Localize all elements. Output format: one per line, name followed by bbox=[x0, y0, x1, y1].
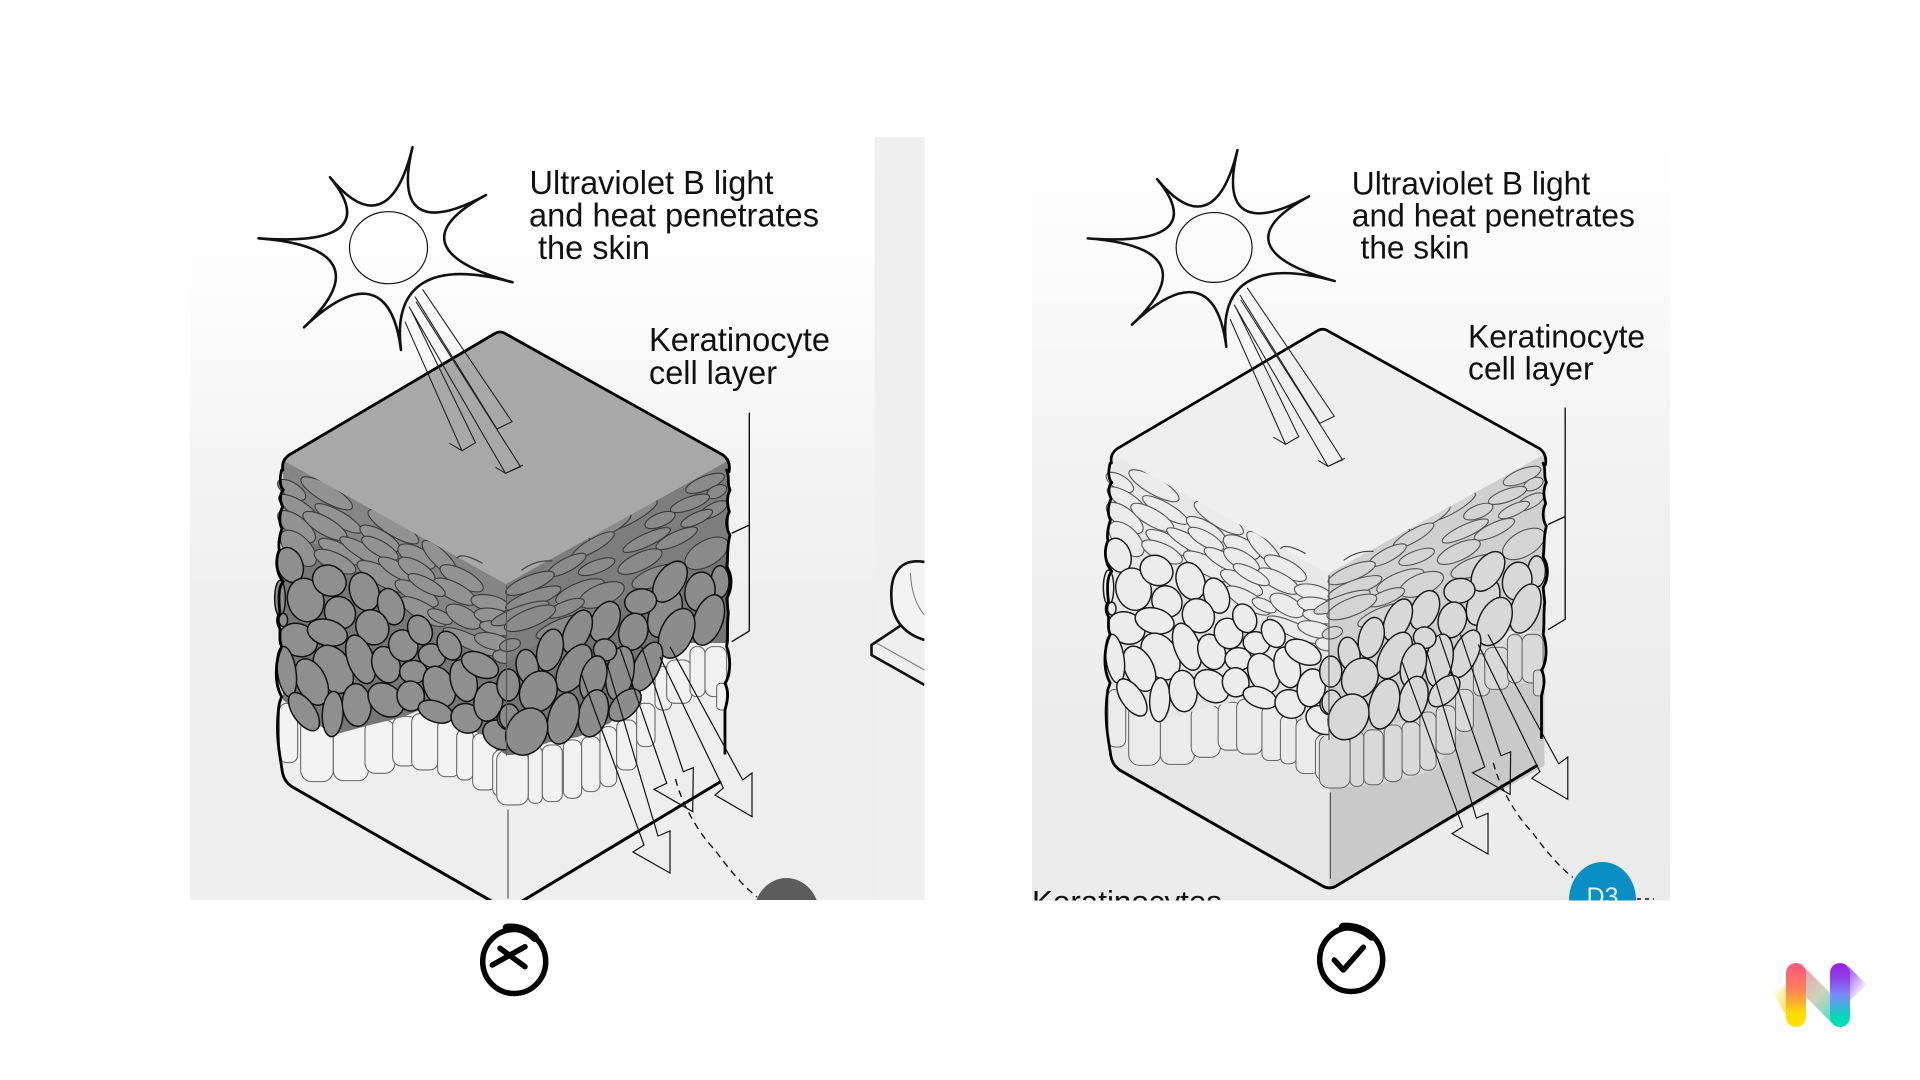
keratinocyte cells right face bbox=[489, 458, 734, 763]
text: ultraviolet label: Ultraviolet B light bbox=[1352, 165, 1590, 201]
text: keratinocyte label: Keratinocyte bbox=[649, 321, 830, 358]
basal cell layer bbox=[1108, 628, 1546, 788]
icon: check mark bbox=[1320, 927, 1383, 992]
vitamin D3 circle bbox=[1569, 862, 1636, 900]
text: ultraviolet label: the skin bbox=[1361, 229, 1470, 265]
neighbouring slide strip bbox=[870, 137, 924, 686]
icon: sun bbox=[258, 147, 512, 350]
text: ultraviolet label: and heat penetrates bbox=[1352, 197, 1635, 233]
text: keratinocyte label: Keratinocyte bbox=[1468, 318, 1645, 354]
vitamin D3 circle: D3 bbox=[1587, 883, 1618, 911]
correct figure bbox=[1088, 150, 1654, 890]
arrows: light passing through skin bbox=[1402, 634, 1568, 854]
text: ultraviolet label: the skin bbox=[538, 229, 650, 266]
arrows: incoming light rays bbox=[1230, 288, 1345, 466]
icon: cross mark bbox=[483, 927, 546, 994]
text: ultraviolet label: and heat penetrates bbox=[529, 196, 819, 234]
skin block lower body bbox=[283, 640, 728, 910]
text: ultraviolet label: Ultraviolet B light bbox=[530, 164, 774, 201]
icon: sun bbox=[1088, 150, 1335, 347]
skin block outline and top face bbox=[1105, 329, 1547, 888]
bracket for keratinocyte layer bbox=[1548, 408, 1565, 630]
arrows: light passing through skin bbox=[582, 647, 752, 873]
bracket for keratinocyte layer bbox=[732, 413, 749, 642]
panel: incorrect example bbox=[190, 137, 926, 952]
logo: gradient N bbox=[1772, 966, 1867, 1022]
grey vitamin circle bbox=[756, 878, 817, 900]
text: keratinocyte label: cell layer bbox=[649, 354, 777, 391]
basal cell layer bbox=[279, 640, 730, 805]
panel background bbox=[190, 401, 874, 900]
dashed path to circle bbox=[676, 779, 757, 897]
arrows: incoming light rays bbox=[405, 289, 523, 473]
text: keratinocyte label: cell layer bbox=[1468, 351, 1594, 387]
keratinocyte cells left face bbox=[1101, 451, 1344, 740]
skin block outline and top face bbox=[276, 332, 731, 908]
dashed path to D3 bbox=[1493, 763, 1573, 877]
keratinocyte cells left face bbox=[272, 458, 522, 756]
panel background bbox=[1032, 360, 1670, 900]
keratinocyte cells right face bbox=[1312, 451, 1550, 747]
text: keratinocytes caption: Keratinocytes bbox=[1032, 884, 1222, 919]
panel: correct example bbox=[1032, 137, 1670, 938]
dashed arrow from D3 bbox=[1637, 898, 1654, 900]
skin block lower body bbox=[1329, 683, 1544, 890]
